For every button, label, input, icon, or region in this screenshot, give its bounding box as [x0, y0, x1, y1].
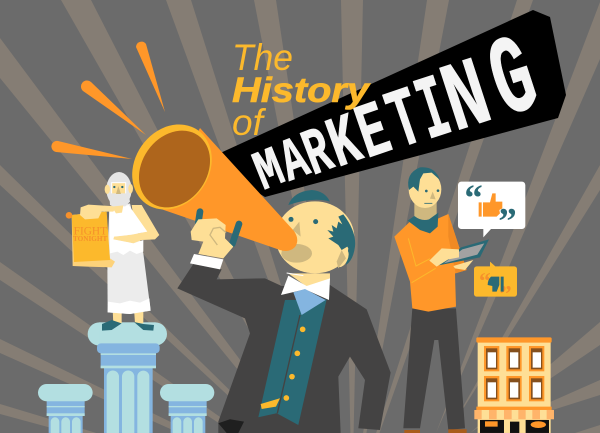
title: of — [232, 102, 267, 143]
megaphone — [116, 109, 297, 251]
shirt cuff — [190, 254, 223, 269]
tablet — [429, 239, 489, 270]
philosopher figure — [66, 172, 159, 331]
building — [474, 337, 554, 433]
banner: marketing: E — [346, 88, 402, 181]
banner: marketing — [205, 10, 566, 207]
jacket — [177, 264, 391, 433]
neck and head — [408, 167, 441, 223]
vest — [258, 299, 327, 425]
column: left small — [38, 384, 93, 433]
title: History — [232, 71, 371, 110]
banner: marketing: K — [318, 102, 373, 188]
banner: marketing: I — [405, 59, 463, 165]
hand on megaphone — [191, 212, 239, 258]
title — [232, 37, 371, 143]
holding hand and arm — [80, 205, 117, 219]
banner: marketing: T — [376, 73, 435, 172]
speech bubble: thumbs down — [474, 262, 517, 308]
speech bubble: thumbs down: ” — [500, 282, 512, 308]
robe hem — [108, 298, 151, 314]
scroll: FIGHT — [74, 226, 107, 238]
banner: marketing: R — [294, 116, 343, 194]
speech bubble: thumbs down: “ — [479, 268, 491, 294]
scarf — [408, 213, 438, 233]
trousers — [403, 308, 465, 430]
speech bubble: thumbs up — [458, 177, 525, 241]
shoes — [404, 429, 467, 433]
banner: marketing: G — [475, 15, 553, 148]
robe — [107, 203, 151, 314]
buttons — [283, 326, 305, 401]
collar and tie — [281, 276, 330, 315]
man with megaphone — [177, 190, 391, 433]
head and beard — [105, 172, 133, 213]
scroll — [66, 212, 115, 267]
man with tablet — [394, 167, 554, 433]
robe upper — [109, 205, 147, 255]
column: right small — [160, 384, 214, 433]
pointing arm — [113, 205, 159, 243]
feet and sandals — [102, 308, 154, 331]
sweater — [394, 214, 467, 312]
scroll: TONIGHT — [73, 234, 107, 243]
jacket shadow — [218, 419, 244, 433]
title: The — [232, 37, 293, 78]
icon: orange burst lines — [51, 42, 165, 159]
speech bubble: thumbs up: “ — [464, 177, 483, 218]
banner: marketing: A — [271, 126, 319, 198]
banner: marketing: N — [430, 40, 504, 159]
belt — [261, 398, 280, 409]
trousers — [238, 412, 307, 433]
banner: marketing: M — [246, 138, 294, 207]
head — [276, 190, 355, 287]
column: centre pedestal — [88, 322, 167, 433]
speech bubble: thumbs up: ” — [498, 200, 517, 241]
